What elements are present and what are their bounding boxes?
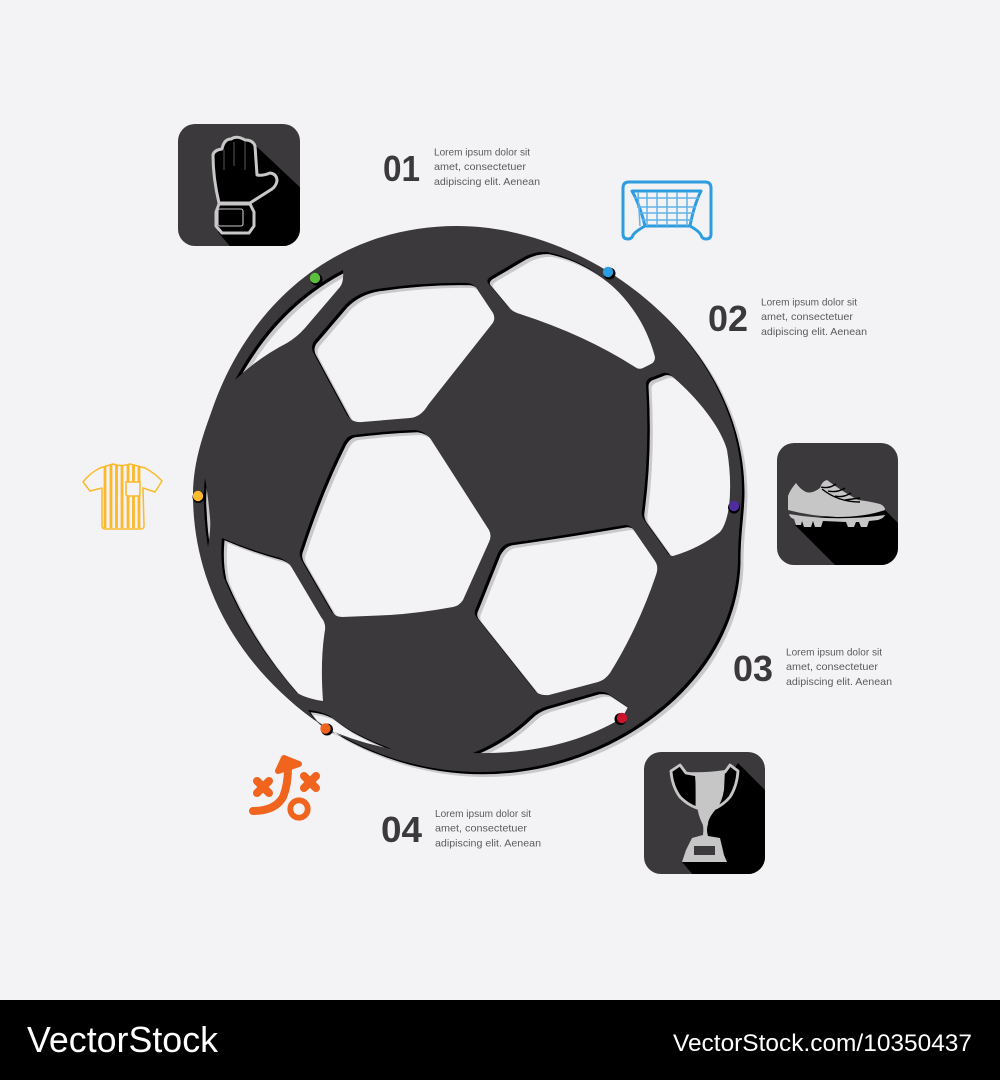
step 04: Lorem ipsum dolor sit [435, 809, 531, 820]
step 03: amet, consectetuer [786, 662, 879, 673]
step 01 [383, 148, 540, 189]
step 01: amet, consectetuer [434, 162, 527, 173]
marker dot: purple [728, 501, 740, 514]
icon tile: trophy [644, 752, 768, 876]
marker dot: orange [320, 723, 333, 736]
marker dot: red [614, 713, 627, 725]
step 01: Lorem ipsum dolor sit [434, 148, 530, 158]
step 02: 02 [708, 298, 748, 339]
marker dot: yellow [192, 491, 204, 503]
footer bar [0, 1000, 1000, 1080]
footer bar: VectorStock [27, 1019, 219, 1060]
step 01: 01 [383, 148, 420, 189]
step 04 [381, 809, 541, 850]
icon: goal net [623, 182, 711, 239]
step 02: amet, consectetuer [761, 312, 854, 323]
marker dot: blue [603, 267, 616, 280]
step 01: adipiscing elit. Aenean [434, 177, 540, 188]
step 02: adipiscing elit. Aenean [761, 327, 867, 338]
icon: referee shirt [83, 464, 162, 529]
marker dot: green [310, 273, 322, 286]
icon tile: goalkeeper glove [178, 124, 305, 250]
step 03: Lorem ipsum dolor sit [786, 648, 882, 658]
step 03: 03 [733, 648, 773, 689]
step 04: adipiscing elit. Aenean [435, 838, 541, 850]
soccer ball [193, 226, 748, 777]
step 03 [733, 648, 892, 689]
step 04: amet, consectetuer [435, 824, 528, 834]
step 03: adipiscing elit. Aenean [786, 677, 892, 688]
footer bar: VectorStock.com/10350437 [673, 1030, 972, 1057]
icon: tactics board [253, 758, 316, 818]
step 04: 04 [381, 809, 422, 850]
step 02 [708, 298, 867, 339]
icon tile: football boot [777, 443, 900, 568]
step 02: Lorem ipsum dolor sit [761, 298, 857, 308]
